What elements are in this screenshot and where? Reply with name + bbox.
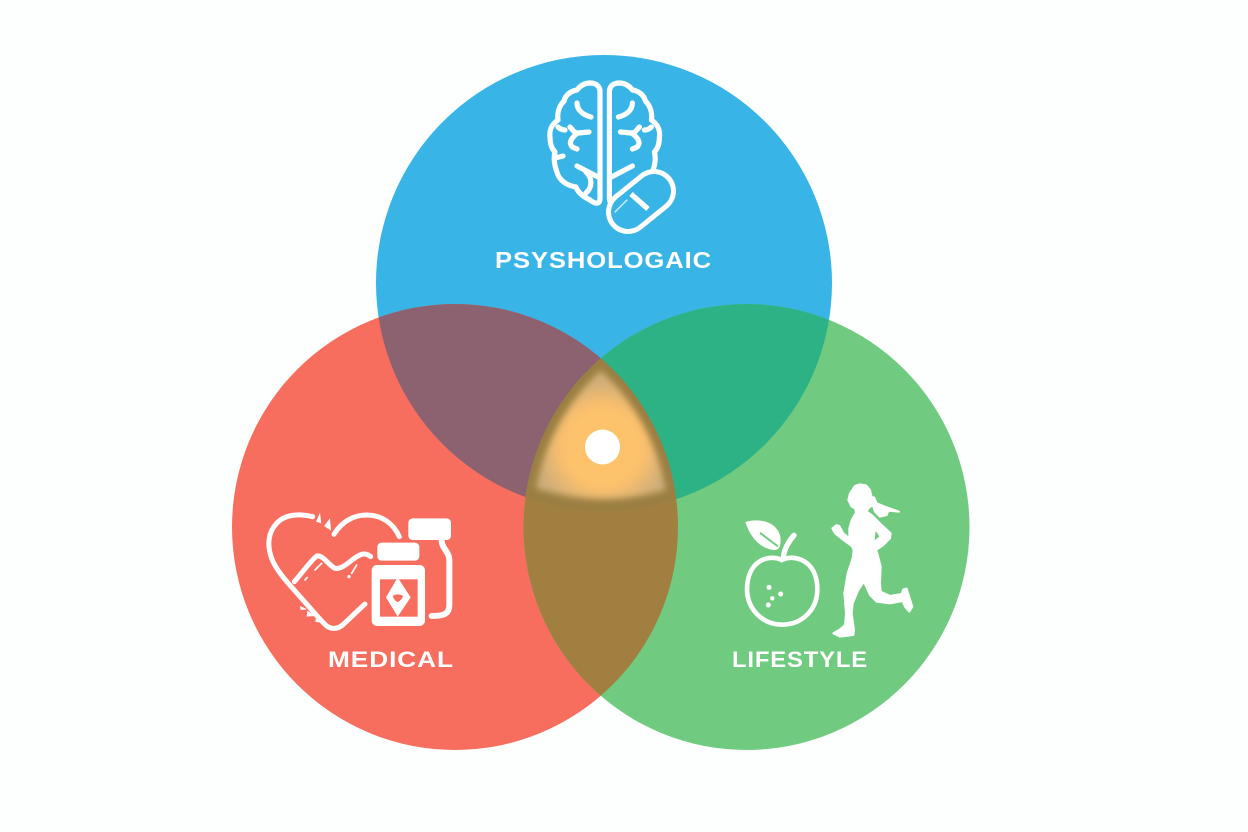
- heartbeat line: [294, 554, 371, 582]
- center overlap: glowing core: [526, 358, 676, 502]
- label: psyshologaic: PSYSHOLOGAIC: [495, 247, 712, 273]
- circle: lifestyle: [524, 304, 970, 750]
- overlap: medical and lifestyle: [524, 358, 678, 696]
- icon: apple: [745, 520, 817, 625]
- heart outline: [269, 515, 399, 628]
- brain: right hemisphere: [609, 83, 660, 203]
- circle: medical: [232, 304, 678, 750]
- overlap: psychological and lifestyle: [526, 304, 829, 500]
- overlap: psychological and medical: [378, 304, 601, 497]
- circle: psychological: [376, 55, 832, 511]
- venn diagram: [232, 55, 970, 750]
- rear bottle: [408, 518, 451, 616]
- front bottle: [372, 543, 425, 626]
- heart sparks: [300, 513, 357, 623]
- icon: heart and medicine bottles: [269, 513, 451, 628]
- brain: left hemisphere: [550, 83, 600, 203]
- pill capsule: [615, 191, 654, 212]
- icon: female runner: [832, 484, 912, 637]
- label: lifestyle: LIFESTYLE: [732, 647, 868, 672]
- icon: brain and pill: [550, 83, 660, 212]
- label: medical: MEDICAL: [328, 647, 454, 672]
